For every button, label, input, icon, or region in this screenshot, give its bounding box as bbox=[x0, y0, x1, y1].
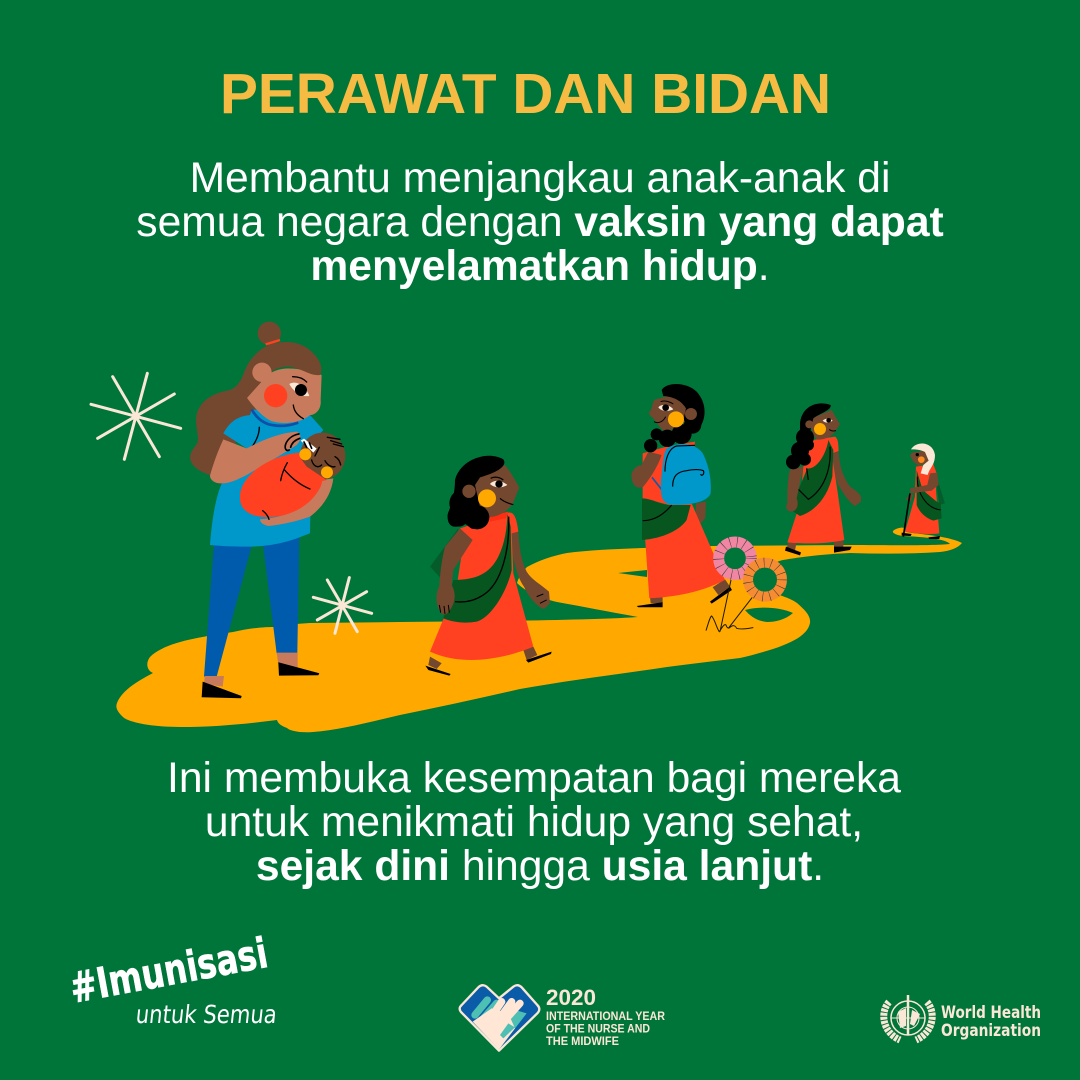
intro text block: Membantu menjangkau anak-anak di bbox=[190, 154, 890, 202]
campaign hashtag: #Imunisasi bbox=[66, 928, 271, 1013]
intro text block bbox=[136, 154, 944, 290]
logo: International Year of the Nurse and the Midwife: OF THE NURSE AND bbox=[546, 1024, 650, 1036]
logo: World Health Organization: World Health bbox=[941, 1003, 1041, 1023]
decorative star large bbox=[91, 373, 181, 459]
logo: International Year of the Nurse and the Midwife: INTERNATIONAL YEAR bbox=[546, 1011, 666, 1023]
intro text block: menyelamatkan hidup. bbox=[310, 242, 770, 290]
closing text block: sejak dini hingga usia lanjut. bbox=[256, 842, 824, 890]
illustration: teen girl with backpack bbox=[631, 384, 732, 607]
illustration: flowers with stems and scribble bbox=[706, 542, 782, 632]
logo: World Health Organization bbox=[884, 995, 1041, 1041]
campaign hashtag bbox=[66, 928, 278, 1029]
logo: International Year of the Nurse and the Midwife: THE MIDWIFE bbox=[546, 1036, 619, 1048]
logo: International Year of the Nurse and the Midwife: 2020 bbox=[546, 985, 596, 1010]
illustration: elderly woman with cane bbox=[902, 443, 945, 539]
closing text block: Ini membuka kesempatan bagi mereka bbox=[167, 754, 901, 802]
decorative star small bbox=[313, 578, 372, 633]
illustration: adult woman with braid bbox=[785, 403, 861, 555]
title: PERAWAT DAN BIDAN bbox=[220, 63, 831, 126]
illustration: nurse holding baby bbox=[190, 322, 345, 698]
logo: World Health Organization: Organization bbox=[941, 1021, 1041, 1041]
campaign hashtag: untuk Semua bbox=[134, 1000, 278, 1029]
illustration: girl in red sari bbox=[425, 456, 552, 676]
closing text block: untuk menikmati hidup yang sehat, bbox=[205, 798, 863, 846]
logo: International Year of the Nurse and the Midwife bbox=[460, 985, 666, 1051]
intro text block: semua negara dengan vaksin yang dapat bbox=[136, 198, 944, 246]
yellow winding path bbox=[116, 528, 962, 732]
closing text block bbox=[167, 754, 901, 890]
